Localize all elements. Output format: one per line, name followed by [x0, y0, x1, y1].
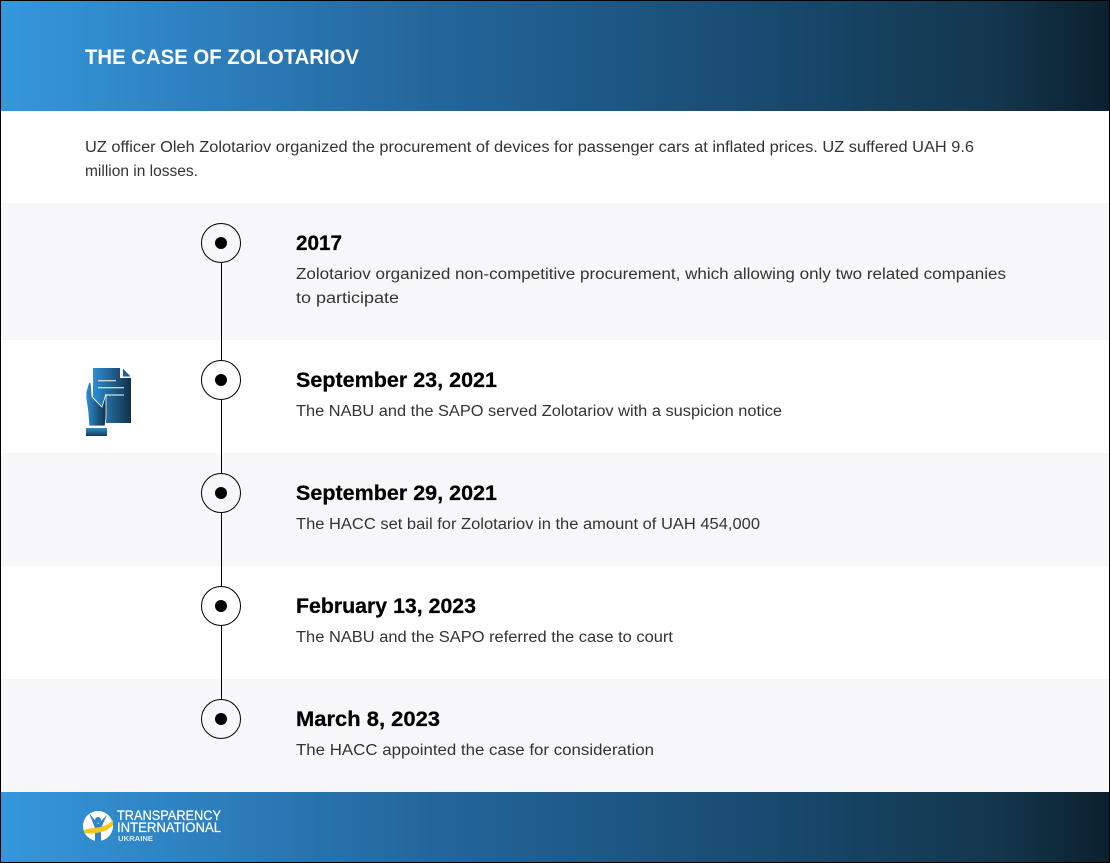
event: 2017 [296, 232, 1006, 307]
timeline connector line [221, 243, 222, 719]
event: March 8, 2023 [296, 708, 654, 759]
logo: Transparency International Ukraine: TRANSPARENCY [117, 808, 221, 823]
event: March 8, 2023: March 8, 2023 [296, 708, 440, 731]
logo: Transparency International Ukraine [83, 808, 221, 843]
event: September 23, 2021: The NABU and the SAPO served Zolotariov with a suspicion notice [296, 403, 782, 420]
event: September 23, 2021 [296, 369, 782, 420]
row backgrounds [0, 203, 1110, 792]
timeline marker: September 29, 2021 [202, 474, 240, 512]
title: THE CASE OF ZOLOTARIOV [85, 45, 360, 69]
intro text: million in losses. [85, 163, 198, 180]
event: February 13, 2023: February 13, 2023 [296, 595, 476, 618]
icon: hand holding document [86, 368, 131, 436]
logo: Transparency International Ukraine: INTERNATIONAL [117, 820, 221, 835]
event: February 13, 2023 [296, 595, 674, 646]
event: September 29, 2021: September 29, 2021 [296, 482, 497, 505]
event: September 23, 2021: September 23, 2021 [296, 369, 497, 392]
logo: Transparency International Ukraine: UKRAINE [118, 836, 153, 843]
header band [0, 0, 1110, 111]
event: September 29, 2021: The HACC set bail for Zolotariov in the amount of UAH 454,000 [296, 516, 760, 533]
event: 2017: Zolotariov organized non-competitive procurement, which allowing only two related companies [296, 266, 1006, 283]
event: March 8, 2023: The HACC appointed the case for consideration [296, 742, 654, 759]
timeline marker: March 8, 2023 [202, 700, 240, 738]
event: February 13, 2023: The NABU and the SAPO referred the case to court [296, 629, 674, 646]
timeline marker: September 23, 2021 [202, 360, 240, 400]
intro text: UZ officer Oleh Zolotariov organized the procurement of devices for passenger cars at inflated prices. UZ suffered UAH 9.6 [85, 139, 974, 156]
timeline marker: February 13, 2023 [202, 586, 240, 626]
event: 2017: 2017 [296, 232, 342, 255]
timeline marker: 2017 [202, 224, 240, 262]
event: 2017: to participate [296, 290, 399, 307]
footer band [0, 792, 1110, 863]
event: September 29, 2021 [296, 482, 760, 533]
intro text [85, 139, 974, 180]
